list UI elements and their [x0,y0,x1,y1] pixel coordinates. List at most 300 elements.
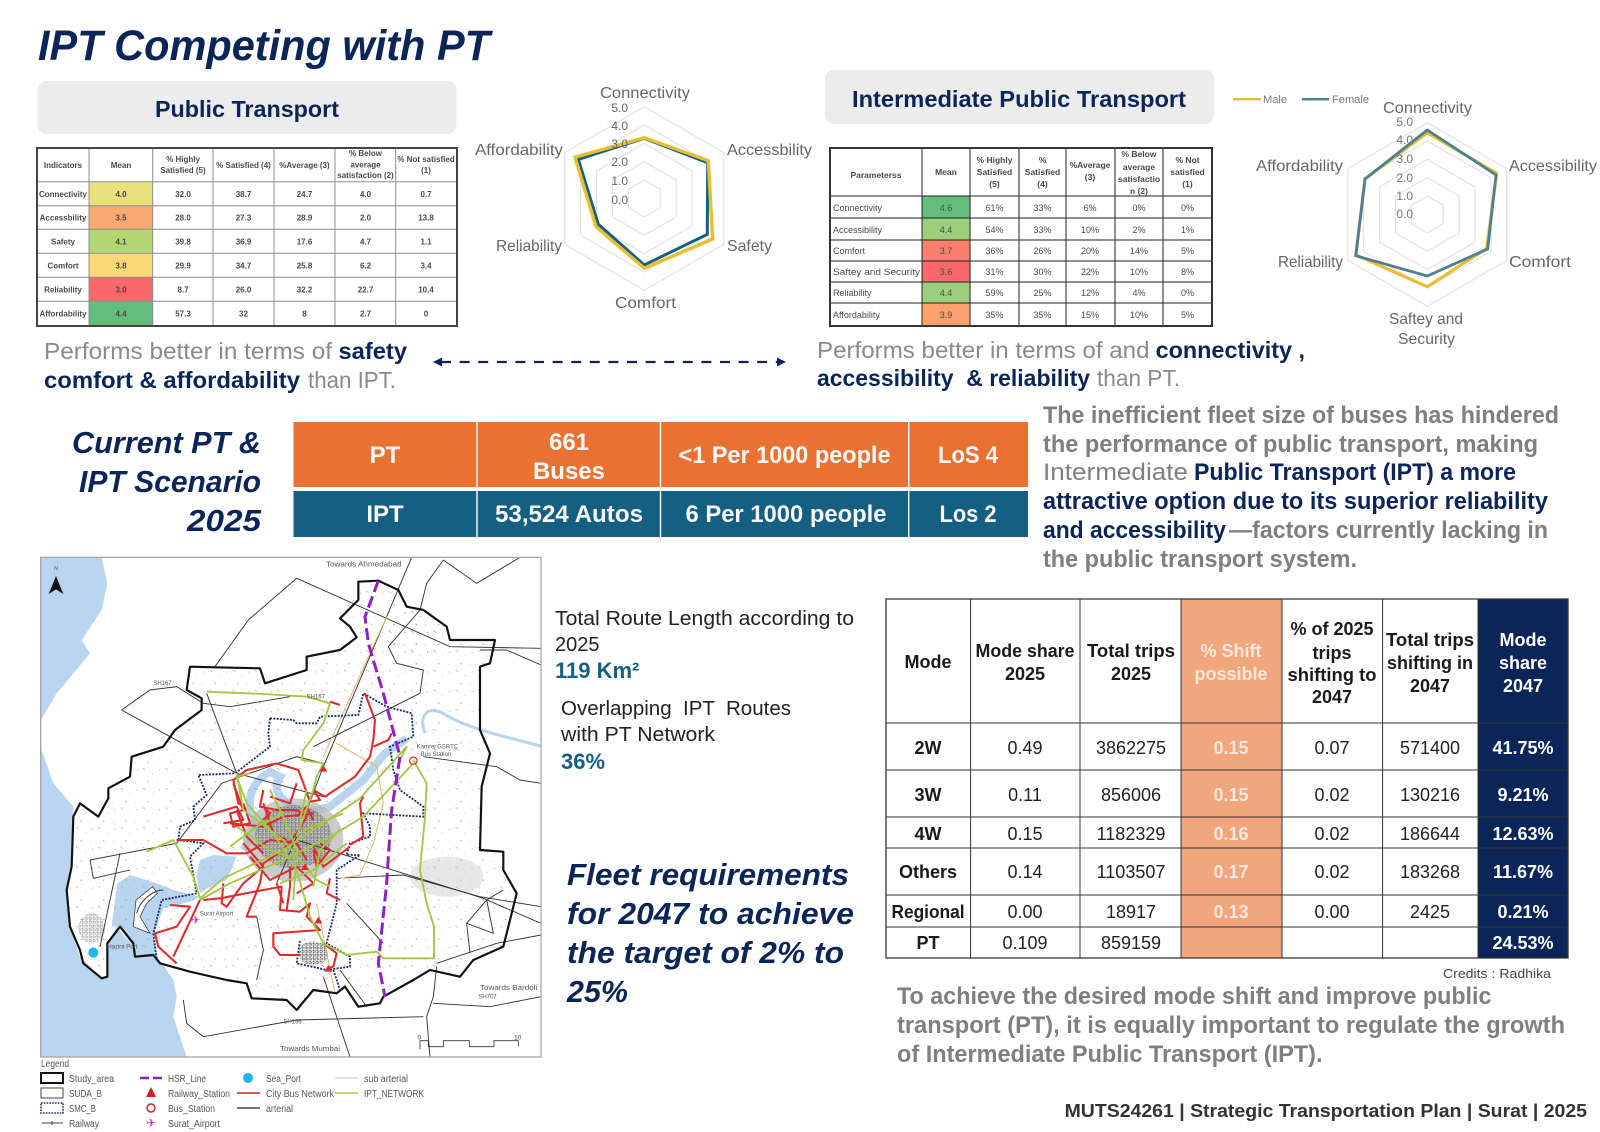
table: mode shift to 2047: Total trips [1386,630,1474,650]
table: mode shift to 2047: 0.00 [1007,902,1043,922]
radar chart: intermediate public transport: Comfort [1509,254,1572,271]
legend symbol: arterial [237,1104,293,1115]
table: public transport satisfaction: 26.0 [236,286,252,294]
radar chart: public transport: 4.0 [611,119,628,133]
callout: fleet requirements: Fleet requirements [567,857,849,892]
text: regulating IPT growth [897,983,1565,1068]
table: public transport satisfaction: 25.8 [297,262,313,270]
text: inefficient fleet size: Public Transport (IPT) a more [1194,459,1516,486]
table: intermediate public transport satisfaction: 14% [1130,246,1148,256]
table: mode shift to 2047: % of 2025 [1290,619,1374,639]
table: mode shift to 2047: 183268 [1400,862,1460,882]
table: mode shift to 2047: 41.75% [1492,738,1554,758]
radar chart: intermediate public transport: 0.0 [1396,207,1413,221]
table: intermediate public transport satisfaction: 0% [1132,203,1146,213]
table: mode shift to 2047: 3W [914,785,942,805]
legend symbol: city bus network [237,1089,335,1100]
table: intermediate public transport satisfaction: 8% [1181,267,1194,277]
radar chart: public transport: 3.0 [611,137,628,151]
legend symbol: bus station [147,1104,215,1115]
table: intermediate public transport satisfaction: (3) [1085,172,1095,182]
legend symbol: IPT network: IPT_NETWORK [364,1089,424,1100]
table: intermediate public transport satisfaction: (5) [989,179,1000,189]
map: route network of Surat: N [54,566,58,572]
table: public transport satisfaction: 0.7 [420,190,432,199]
table: mode shift to 2047: 571400 [1400,738,1460,758]
legend symbol: bus station: Bus_Station [168,1104,215,1115]
table: mode shift to 2047: 12.63% [1492,824,1554,844]
table: public transport satisfaction: satisfaction (2) [337,171,394,180]
table: public transport satisfaction: Connectivity [39,190,88,199]
table: public transport satisfaction: average [350,160,381,170]
legend symbol: IPT network [335,1089,424,1100]
radar chart: public transport: Connectivity [600,85,690,102]
table: current PT and IPT scenario: Buses [533,458,605,485]
table: intermediate public transport satisfaction: % Below [1122,149,1157,159]
table: intermediate public transport satisfaction: 4.4 [940,225,952,235]
table: mode shift to 2047: 2047 [1312,687,1352,707]
map: route network of Surat: SH167 [307,694,326,700]
text: inefficient fleet size: The inefficient fleet size of buses has hindered [1043,402,1559,429]
table: mode shift to 2047: 4W [914,824,942,844]
table: mode shift to 2047: 1103507 [1097,862,1165,882]
callout: fleet requirements: the target of 2% to [567,935,844,970]
table: public transport satisfaction: Accessbility [40,214,87,222]
table: intermediate public transport satisfaction: satisfactio [1118,174,1160,184]
table: public transport satisfaction: 24.7 [297,190,313,199]
text: inefficient fleet size: the performance of public transport, making [1043,431,1538,458]
callout: fleet requirements: 25% [566,974,628,1009]
radar chart: intermediate public transport: 1.0 [1396,189,1413,203]
table: intermediate public transport satisfaction: Satisfied [1025,167,1060,177]
table: intermediate public transport satisfaction: 30% [1033,267,1052,277]
text: public transport performance: comfort & affordability [44,367,300,393]
table: mode shift to 2047: possible [1194,664,1268,684]
table: intermediate public transport satisfaction: 3.9 [940,310,952,320]
text: intermediate public transport performance: connectivity , [1156,337,1305,363]
table: intermediate public transport satisfaction: 3.7 [940,246,952,256]
table: intermediate public transport satisfaction: 33% [1033,203,1052,213]
legend symbol: SUDA boundary [41,1088,102,1100]
legend symbol: HSR line: HSR_Line [168,1074,206,1085]
radar chart: public transport: 0.0 [611,193,628,207]
legend symbol: railway [42,1119,99,1130]
legend symbol: airport: ✈ [146,1116,156,1130]
table: public transport satisfaction: 13.8 [418,214,434,222]
table: mode shift to 2047: 859159 [1101,933,1161,953]
stat: overlapping routes: 36% [561,749,605,774]
table: public transport satisfaction: 4.7 [360,238,372,246]
table: public transport satisfaction: 36.9 [236,238,252,246]
table: public transport satisfaction: 3.5 [115,214,127,222]
heading: Intermediate Public Transport: Intermediate Public Transport [852,86,1186,112]
table: intermediate public transport satisfaction: 6% [1083,203,1097,213]
table: mode shift to 2047: 0.49 [1007,738,1043,758]
table: public transport satisfaction: % Below [349,149,383,158]
table: public transport satisfaction [37,148,457,326]
legend symbol: HSR line [140,1074,206,1085]
table: mode shift to 2047: 856006 [1101,785,1161,805]
map legend [41,1059,424,1130]
table: intermediate public transport satisfaction: Comfort [833,246,866,256]
legend: male and female [1233,94,1369,106]
table: intermediate public transport satisfaction: 4.4 [940,288,952,298]
map: route network of Surat: SH167 [153,681,172,687]
table: public transport satisfaction: 17.6 [297,238,313,246]
stat: total route length: Total Route Length according to [555,608,854,630]
table: public transport satisfaction: 1.1 [420,238,432,246]
table: public transport satisfaction: 57.3 [175,310,191,318]
table: mode shift to 2047: 0.00 [1314,902,1350,922]
table: mode shift to 2047: 0.21% [1497,902,1549,922]
table: mode shift to 2047: 2047 [1410,676,1450,696]
table: mode shift to 2047: 130216 [1400,785,1460,805]
legend symbol: arterial: arterial [266,1104,293,1115]
legend symbol: city bus network: City Bus Network [266,1089,335,1100]
radar chart: intermediate public transport: 3.0 [1396,152,1413,166]
radar chart: intermediate public transport: Security [1398,331,1455,348]
table: public transport satisfaction: 8.7 [177,286,189,294]
table: public transport satisfaction: Comfort [47,262,79,270]
title: IPT Competing with PT [38,22,494,70]
radar chart: public transport: 5.0 [611,101,628,115]
table: mode shift to 2047: 2047 [1503,676,1543,696]
table: intermediate public transport satisfaction: 4% [1132,288,1146,298]
table: mode shift to 2047: 2W [914,738,942,758]
text: regulating IPT growth: To achieve the desired mode shift and improve public [897,983,1492,1010]
table: mode shift to 2047: 2025 [1111,664,1151,684]
map: route network of Surat: Towards Bardoli [480,983,538,992]
table: intermediate public transport satisfaction: Satisfied [977,167,1012,177]
table: mode shift to 2047: % Shift [1200,641,1262,661]
stat: overlapping routes: Overlapping IPT Routes [561,698,791,720]
table: intermediate public transport satisfaction: 2% [1132,225,1146,235]
table: public transport satisfaction: % Highly [166,155,200,164]
table: intermediate public transport satisfaction: 5% [1181,310,1194,320]
table: mode shift to 2047: 2025 [1005,664,1045,684]
table: intermediate public transport satisfaction: %Average [1070,160,1111,170]
table: mode shift to 2047: 1182329 [1097,824,1165,844]
table: mode shift to 2047: 0.109 [1002,933,1048,953]
table: intermediate public transport satisfaction: 54% [985,225,1004,235]
table: intermediate public transport satisfaction: 1% [1181,225,1194,235]
table: current PT and IPT scenario: LoS 4 [938,442,999,469]
stat: overlapping routes: with PT Network [560,724,716,746]
table: intermediate public transport satisfaction: 0% [1181,203,1194,213]
footer: MUTS24261 | Strategic Transportation Plan | Surat | 2025 [1065,1101,1587,1121]
table: public transport satisfaction: 39.8 [175,238,191,246]
table: intermediate public transport satisfaction: Saftey and Security [833,267,921,277]
table: current PT and IPT scenario: 6 Per 1000 people [686,501,886,528]
table: intermediate public transport satisfaction: 0% [1181,288,1194,298]
table: mode shift to 2047: 0.07 [1314,738,1350,758]
text: intermediate public transport performance: accessibility & reliability [817,365,1090,391]
table: public transport satisfaction: 32.0 [175,190,191,199]
table: mode shift to 2047: Others [899,862,957,882]
table: mode shift to 2047: 11.67% [1493,862,1553,882]
table: public transport satisfaction: 38.7 [236,190,252,199]
table: mode shift to 2047 [886,599,1568,958]
table: public transport satisfaction: % Not satisfied [397,155,455,164]
legend symbol: railway: Railway [69,1119,99,1130]
table: intermediate public transport satisfaction: 35% [985,310,1004,320]
legend symbol: SMC boundary [41,1103,96,1115]
map: route network of Surat: Towards Mumbai [280,1044,340,1053]
table: mode shift to 2047: Mode [1500,630,1546,650]
map: route network of Surat: Kamrej GSRTC [417,744,459,750]
table: public transport satisfaction: 22.7 [358,286,374,294]
stat: overlapping routes [560,698,791,774]
table: public transport satisfaction: 28.9 [297,214,313,222]
table: public transport satisfaction: 32.2 [297,286,313,294]
legend symbol: sea port: Sea_Port [266,1074,301,1085]
radar chart: public transport [475,85,812,312]
map: route network of Surat: Surat Airport [200,912,234,918]
legend symbol: airport: Surat_Airport [168,1119,220,1130]
table: intermediate public transport satisfaction: Connectivity [833,203,883,213]
table: mode shift to 2047: share [1499,653,1547,673]
table: public transport satisfaction: 3.8 [115,262,127,270]
radar chart: public transport: 1.0 [611,174,628,188]
text: inefficient fleet size: the public transport system. [1043,546,1357,573]
table: mode shift to 2047: 0.14 [1007,862,1043,882]
table: intermediate public transport satisfaction: average [1123,162,1155,172]
radar chart: intermediate public transport: Accessibility [1509,158,1597,175]
table: current PT and IPT scenario: 661 [549,429,589,456]
table: intermediate public transport satisfaction: 35% [1033,310,1052,320]
text: public transport performance: safety [338,338,407,364]
heading: current scenario: 2025 [186,503,262,538]
table: mode shift to 2047: 186644 [1400,824,1460,844]
table: intermediate public transport satisfaction: 20% [1081,246,1099,256]
table: public transport satisfaction: 6.2 [360,262,372,270]
arrow: two-way comparison [433,358,786,366]
radar chart: public transport: Safety [727,238,772,255]
table: public transport satisfaction: 34.7 [236,262,252,270]
text: intermediate public transport performance [817,337,1305,391]
table: public transport satisfaction: 27.3 [236,214,252,222]
table: mode shift to 2047: 2425 [1410,902,1450,922]
table: current PT and IPT scenario: 53,524 Autos [495,501,643,528]
callout: fleet requirements [566,857,854,1009]
map: route network of Surat: 10 [514,1034,522,1041]
table: public transport satisfaction: Indicators [44,161,83,170]
table: intermediate public transport satisfaction: Mean [935,167,957,177]
text: regulating IPT growth: transport (PT), it is equally important to regulate the growth [897,1012,1565,1039]
table: public transport satisfaction: Reliability [44,286,82,294]
text: public transport performance: than IPT. [308,367,396,393]
table: mode shift to 2047: 0.02 [1314,862,1350,882]
table: mode shift to 2047: Total trips [1087,641,1175,661]
table: public transport satisfaction: 4.1 [115,238,127,246]
heading: current scenario: Current PT & [72,425,261,460]
table: intermediate public transport satisfaction: Affordability [833,310,880,320]
text: inefficient fleet size: and accessibility [1043,517,1227,544]
map: route network of Surat: Towards Ahmedabad [326,559,402,568]
table: intermediate public transport satisfaction: 15% [1081,310,1099,320]
table: mode shift to 2047: trips [1312,643,1352,663]
radar chart: intermediate public transport: 4.0 [1396,133,1413,147]
radar chart: intermediate public transport: 2.0 [1396,171,1413,185]
table: public transport satisfaction: 3.4 [420,262,432,270]
legend: male and female: Female [1332,94,1369,106]
table: intermediate public transport satisfaction: 61% [985,203,1004,213]
map: route network of Surat: ✈ [191,915,200,927]
table: intermediate public transport satisfaction: 36% [985,246,1004,256]
map legend: Legend [41,1059,69,1070]
map: route network of Surat: Hazira Port [107,944,138,950]
table: intermediate public transport satisfaction: 33% [1033,225,1052,235]
table: mode shift to 2047: shifting to [1288,665,1376,685]
radar chart: intermediate public transport: Connectivity [1383,100,1472,117]
legend symbol: sub arterial [335,1074,408,1085]
table: mode shift to 2047: 0.17 [1213,862,1249,882]
callout: fleet requirements: for 2047 to achieve [567,896,854,931]
table: mode shift to 2047: 18917 [1106,902,1156,922]
table: intermediate public transport satisfaction: 59% [985,288,1004,298]
legend symbol: railway station: Railway_Station [168,1089,230,1100]
map: route network of Surat: SH196 [283,1019,302,1025]
table: mode shift to 2047: Mode [904,652,952,672]
radar chart: public transport: Accessbility [727,142,812,159]
radar chart: public transport: 2.0 [611,155,628,169]
table: mode shift to 2047: 0.13 [1213,902,1249,922]
heading: Intermediate Public Transport [825,70,1214,124]
text: inefficient fleet size [1043,402,1559,573]
table: public transport satisfaction: 32 [239,310,248,318]
table: public transport satisfaction: 3.0 [115,286,127,294]
stat: total route length: 2025 [555,634,600,656]
text: inefficient fleet size: Intermediate [1043,459,1188,486]
radar chart: public transport: Comfort [615,295,677,312]
table: mode shift to 2047: 0.11 [1008,785,1042,805]
table: intermediate public transport satisfaction: 26% [1033,246,1052,256]
table: current PT and IPT scenario: IPT [366,501,404,528]
table: intermediate public transport satisfaction: Parameterss [850,170,902,180]
table: mode shift to 2047: 0.15 [1213,738,1249,758]
table: mode shift to 2047: 9.21% [1497,785,1549,805]
table: intermediate public transport satisfaction: n (2) [1130,186,1148,196]
heading: Public Transport: Public Transport [155,96,339,122]
table: mode shift to 2047: 0.15 [1213,785,1249,805]
table: public transport satisfaction: 10.4 [418,286,434,294]
table: intermediate public transport satisfaction: Reliability [833,288,872,298]
heading: current scenario: IPT Scenario [79,464,261,499]
radar chart: intermediate public transport: Affordability [1256,158,1343,175]
table: mode shift to 2047: Regional [892,902,964,922]
table: intermediate public transport satisfaction: satisfied [1170,167,1205,177]
table: public transport satisfaction: % Satisfied (4) [216,161,271,170]
text: public transport performance [44,338,407,393]
text: intermediate public transport performance: than PT. [1097,365,1180,391]
text: intermediate public transport performance: Performs better in terms of and [817,337,1150,363]
table: mode shift to 2047: 0.15 [1007,824,1043,844]
table: mode shift to 2047: 24.53% [1492,933,1554,953]
radar chart: intermediate public transport: 5.0 [1396,115,1413,129]
table: public transport satisfaction: Satisfied (5) [160,166,206,175]
table: intermediate public transport satisfaction: 3.6 [940,267,952,277]
stat: total route length [555,608,854,683]
text: inefficient fleet size: attractive option due to its superior reliability [1043,488,1549,515]
table: mode shift to 2047: 3862275 [1096,738,1166,758]
text: public transport performance: Performs better in terms of [44,338,333,364]
heading: current scenario [72,425,262,538]
legend symbol: SUDA boundary: SUDA_B [69,1089,102,1100]
table: public transport satisfaction: Safety [51,238,76,246]
table: intermediate public transport satisfaction: 4.6 [940,203,952,213]
table: intermediate public transport satisfaction [830,148,1212,326]
table: intermediate public transport satisfaction: (1) [1182,179,1193,189]
table: intermediate public transport satisfaction: 12% [1081,288,1099,298]
map: route network of Surat [41,557,541,1057]
legend symbol: sea port [243,1073,301,1085]
heading: Public Transport [38,81,456,134]
map: route network of Surat: SH707 [478,994,497,1000]
radar chart: intermediate public transport [1256,100,1597,348]
table: intermediate public transport satisfaction: 31% [985,267,1004,277]
credits: Credits : Radhika [1443,966,1552,981]
table: public transport satisfaction: 4.4 [115,310,127,318]
table: intermediate public transport satisfaction: (4) [1037,179,1048,189]
table: public transport satisfaction: 28.0 [175,214,191,222]
legend symbol: SMC boundary: SMC_B [69,1104,96,1115]
table: current PT and IPT scenario: Los 2 [940,501,996,528]
table: intermediate public transport satisfaction: 5% [1181,246,1194,256]
stat: total route length: 119 Km² [555,658,639,683]
legend: male and female: Male [1263,94,1287,106]
table: mode shift to 2047: PT [916,933,940,953]
table: public transport satisfaction: (1) [421,166,431,175]
radar chart: public transport: Affordability [475,142,563,159]
table: mode shift to 2047: shifting in [1387,653,1473,673]
table: public transport satisfaction: %Average (3) [279,161,330,170]
table: public transport satisfaction: 2.7 [360,310,372,318]
table: public transport satisfaction: Mean [111,161,131,170]
radar chart: intermediate public transport: Saftey and [1389,311,1463,328]
table: public transport satisfaction: 8 [302,310,307,318]
table: intermediate public transport satisfaction: 10% [1081,225,1099,235]
radar chart: public transport: Reliability [496,238,562,255]
table: mode shift to 2047: 0.02 [1314,824,1350,844]
table: current PT and IPT scenario: PT [370,442,401,469]
legend symbol: sub arterial: sub arterial [364,1074,408,1085]
table: intermediate public transport satisfaction: % Not [1175,155,1200,165]
table: intermediate public transport satisfaction: 10% [1130,310,1148,320]
map: route network of Surat: 0 [417,1034,421,1041]
legend symbol: study area: Study_area [69,1074,114,1085]
table: public transport satisfaction: 0 [424,310,429,318]
map: route network of Surat: Bus Station [421,752,451,758]
table: intermediate public transport satisfaction: 10% [1130,267,1148,277]
text: inefficient fleet size: —factors currently lacking in [1229,517,1548,544]
table: intermediate public transport satisfaction: % [1039,155,1047,165]
table: public transport satisfaction: 2.0 [360,214,372,222]
legend symbol: railway station [146,1087,230,1100]
table: public transport satisfaction: 29.9 [175,262,191,270]
table: public transport satisfaction: 4.0 [115,190,127,199]
table: mode shift to 2047: Mode share [976,641,1074,661]
table: public transport satisfaction: 4.0 [360,190,372,199]
table: intermediate public transport satisfaction: 25% [1033,288,1052,298]
table: intermediate public transport satisfaction: Accessibility [833,225,883,235]
table: intermediate public transport satisfaction: 22% [1081,267,1099,277]
table: public transport satisfaction: Affordability [39,310,87,318]
legend symbol: study area [41,1073,114,1085]
text: regulating IPT growth: of Intermediate Public Transport (IPT). [897,1041,1322,1068]
legend symbol: airport [146,1116,220,1130]
table: current PT and IPT scenario: <1 Per 1000 people [678,442,890,469]
radar chart: intermediate public transport: Reliability [1278,254,1343,271]
